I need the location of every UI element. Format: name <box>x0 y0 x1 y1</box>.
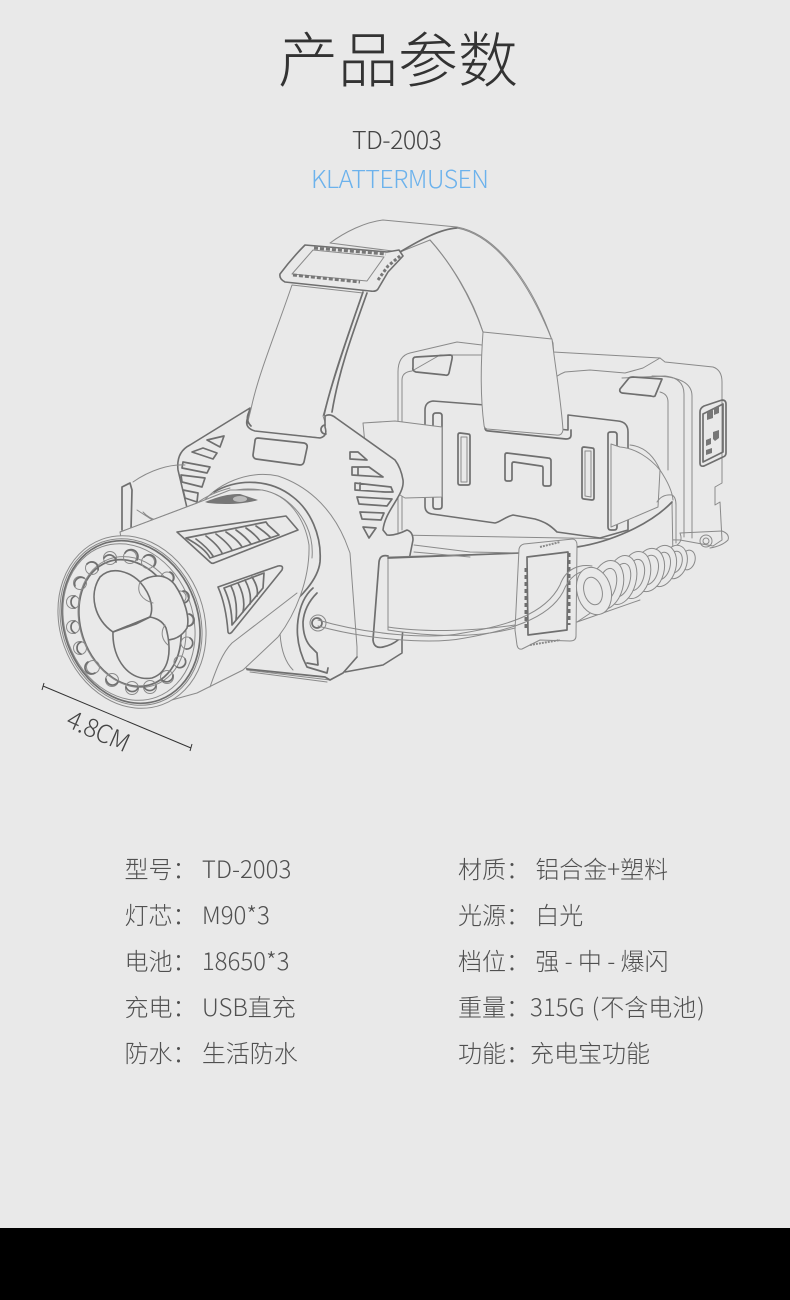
lamp front face <box>34 515 230 729</box>
slot: right long <box>608 432 617 530</box>
spec: battery: 电池： 18650*3 <box>124 942 289 977</box>
right strap end loop <box>630 445 676 543</box>
title: 产品参数 <box>278 13 518 100</box>
upper vent <box>177 516 298 563</box>
cable pivot <box>312 618 322 628</box>
hook opening <box>505 453 551 486</box>
ring of small LEDs <box>66 550 194 694</box>
spec: light source: 光源： 白光 <box>458 896 583 931</box>
coiled power cable <box>318 531 728 641</box>
triple main lens <box>94 571 188 678</box>
top head strap <box>330 220 560 440</box>
battery tab right <box>620 377 662 396</box>
yoke vents left <box>181 436 224 502</box>
yoke plate <box>178 408 413 672</box>
buckle upper <box>280 245 403 291</box>
head strap edge <box>324 292 367 415</box>
spec: charging: 充电： USB直充 <box>124 988 296 1023</box>
rear housing behind lamp <box>122 465 185 530</box>
slot: left inner <box>458 433 470 485</box>
battery tab left <box>413 355 452 375</box>
rear strap piece <box>481 332 563 435</box>
spec: waterproof: 防水： 生活防水 <box>124 1034 298 1069</box>
spec: function: 功能：充电宝功能 <box>458 1034 650 1069</box>
yoke vents right <box>350 452 393 538</box>
pivot side arm <box>280 588 328 673</box>
headlamp line drawing <box>42 220 729 752</box>
charging switch panel <box>700 400 726 466</box>
lower strap left loop bracket <box>373 556 398 647</box>
lower vent <box>218 566 282 634</box>
spec: LED: 灯芯： M90*3 <box>124 896 270 931</box>
lamp body barrel <box>120 488 309 706</box>
mounting plate <box>425 401 628 538</box>
yoke label window <box>253 438 307 465</box>
spec: weight: 重量：315G (不含电池) <box>458 988 705 1023</box>
spec: model: 型号： TD-2003 <box>124 850 291 885</box>
lamp arch housing <box>197 474 357 682</box>
dimension label: 4.8CM <box>62 700 136 760</box>
battery box <box>398 342 726 546</box>
model number: TD-2003 <box>352 121 441 157</box>
slot: right inner <box>582 447 594 500</box>
spec: modes: 档位： 强 - 中 - 爆闪 <box>458 942 669 977</box>
left webbing <box>363 421 442 498</box>
lower head strap <box>388 502 673 635</box>
dimension line <box>42 683 192 751</box>
spec: material: 材质： 铝合金+塑料 <box>458 850 668 885</box>
lower buckle <box>515 539 577 649</box>
brand name: KLATTERMUSEN <box>311 160 488 196</box>
right webbing <box>611 444 660 527</box>
black footer band <box>0 1228 790 1300</box>
slot: left long <box>433 413 442 509</box>
head strap front section <box>247 285 363 438</box>
